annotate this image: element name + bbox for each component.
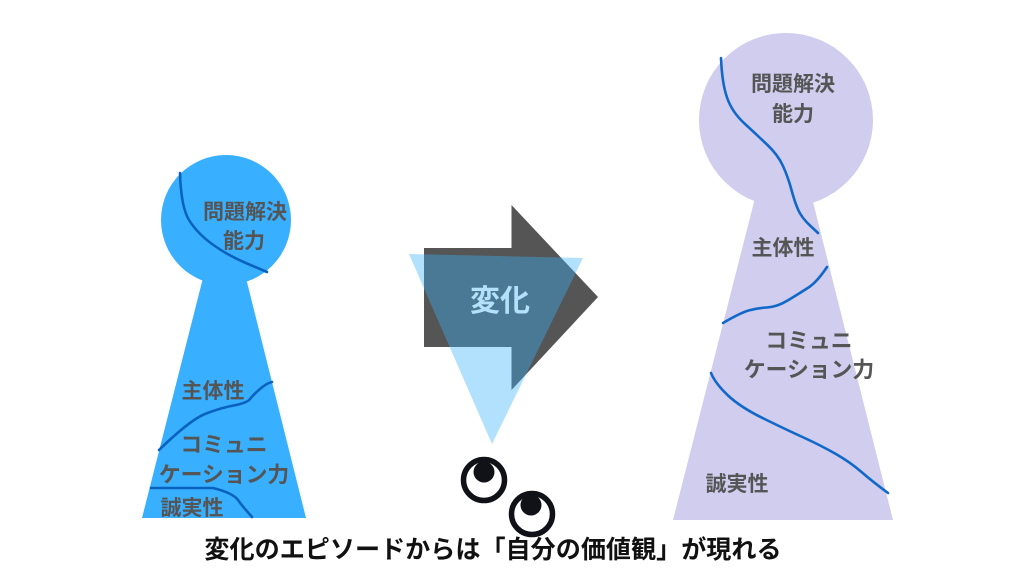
boundary lines: blue keyhole xyxy=(151,173,272,517)
labels: blue keyhole: 能力 xyxy=(223,230,265,253)
panel: small blue keyhole (before) xyxy=(142,155,306,520)
labels: blue keyhole: 誠実性 xyxy=(160,497,224,520)
labels: lavender keyhole xyxy=(706,73,874,496)
labels: blue keyhole: ケーション力 xyxy=(159,462,289,487)
text: change label: 変化 xyxy=(470,285,530,318)
labels: blue keyhole: 主体性 xyxy=(182,380,244,403)
labels: lavender keyhole: 問題解決 xyxy=(751,73,835,96)
triangle: translucent light blue xyxy=(409,254,583,444)
keyhole shape: lavender xyxy=(673,33,893,520)
icon: left eye xyxy=(464,460,504,500)
labels: lavender keyhole: ケーション力 xyxy=(744,357,874,382)
labels: lavender keyhole: 主体性 xyxy=(752,237,814,260)
labels: lavender keyhole: 能力 xyxy=(772,103,814,126)
arrow: change xyxy=(424,205,598,390)
keyhole shape: blue xyxy=(142,155,306,518)
panel: large lavender keyhole (after) xyxy=(673,33,893,520)
icon: right eye xyxy=(512,494,552,534)
labels: blue keyhole: コミュニ xyxy=(180,432,268,457)
labels: blue keyhole xyxy=(159,201,289,520)
title: bottom caption: 変化のエピソードからは「自分の価値観」が現れる xyxy=(204,535,782,564)
labels: blue keyhole: 問題解決 xyxy=(203,201,287,224)
labels: lavender keyhole: コミュニ xyxy=(765,328,853,353)
boundary lines: lavender keyhole xyxy=(711,58,888,493)
labels: lavender keyhole: 誠実性 xyxy=(706,473,768,496)
